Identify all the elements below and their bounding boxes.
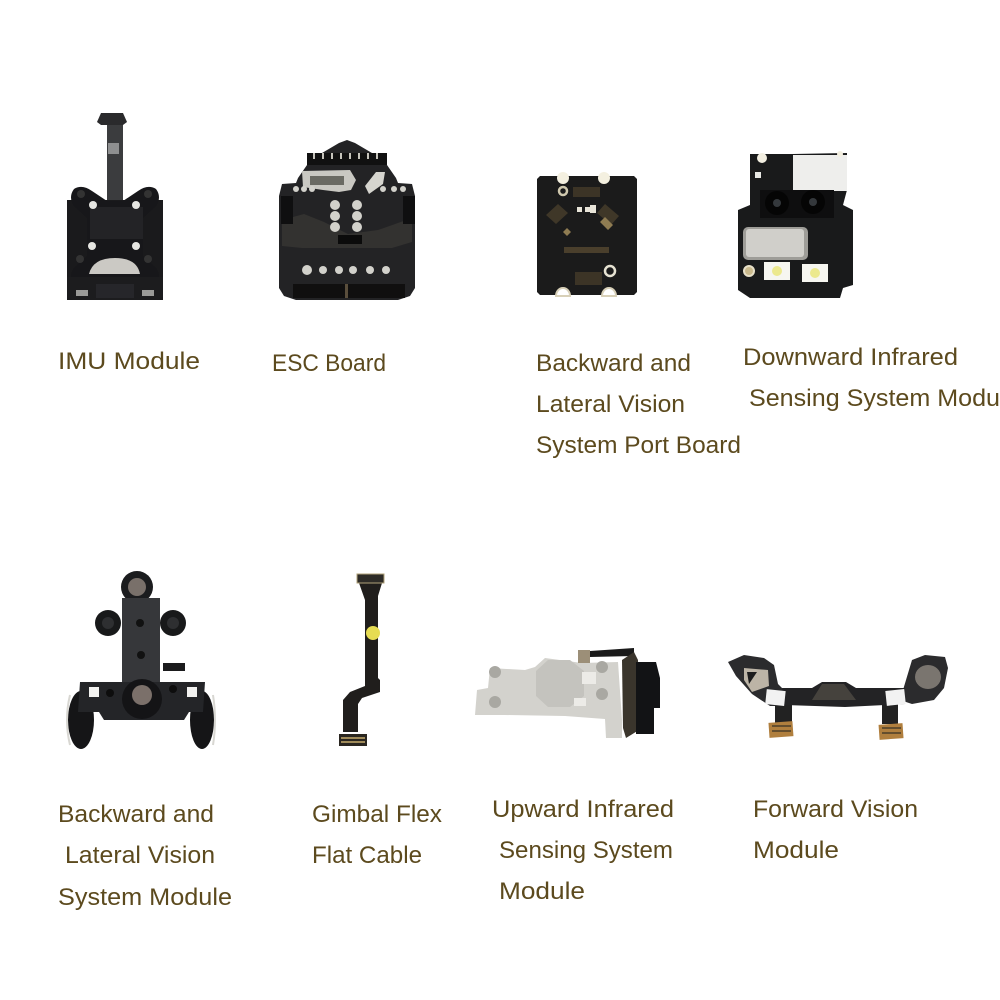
label: Backward and Lateral Vision System Module: System Module — [58, 884, 232, 911]
label: Gimbal Flex Flat Cable: Flat Cable — [312, 842, 422, 869]
label: ESC Board: ESC Board — [272, 350, 386, 377]
label: Backward and Lateral Vision System Port Board: Lateral Vision — [536, 391, 685, 418]
label: Backward and Lateral Vision System Port Board — [536, 350, 741, 459]
label: Downward Infrared Sensing System Module: Downward Infrared — [743, 344, 958, 371]
label: Downward Infrared Sensing System Module — [743, 344, 1000, 412]
label: Forward Vision Module: Module — [753, 837, 839, 864]
icon: downward infrared sensing system module — [738, 151, 853, 298]
label: Upward Infrared Sensing System Module: Upward Infrared — [492, 796, 674, 823]
label: Backward and Lateral Vision System Port Board: System Port Board — [536, 432, 741, 459]
label: Upward Infrared Sensing System Module: Module — [499, 878, 585, 905]
icon: IMU module — [67, 113, 163, 300]
icon: upward infrared sensing system module — [475, 648, 660, 738]
label: Downward Infrared Sensing System Module: Sensing System Modu — [749, 385, 1000, 412]
icon: backward and lateral vision system port board — [537, 172, 637, 296]
label: Upward Infrared Sensing System Module — [492, 796, 674, 905]
icon: gimbal flex flat cable — [339, 574, 384, 746]
label: IMU Module: IMU Module — [58, 348, 200, 375]
label: Forward Vision Module: Forward Vision — [753, 796, 918, 823]
label: Backward and Lateral Vision System Module: Backward and — [58, 801, 214, 828]
label: Backward and Lateral Vision System Module — [58, 801, 232, 911]
label: Gimbal Flex Flat Cable: Gimbal Flex — [312, 801, 442, 828]
label: Gimbal Flex Flat Cable — [312, 801, 442, 869]
label: Upward Infrared Sensing System Module: Sensing System — [499, 837, 673, 864]
label: Backward and Lateral Vision System Module: Lateral Vision — [65, 842, 215, 869]
label: Backward and Lateral Vision System Port Board: Backward and — [536, 350, 691, 377]
icon: forward vision module — [728, 655, 948, 740]
icon: backward and lateral vision system module — [67, 571, 215, 749]
icon: ESC board — [279, 140, 415, 300]
label: Forward Vision Module — [753, 796, 918, 864]
